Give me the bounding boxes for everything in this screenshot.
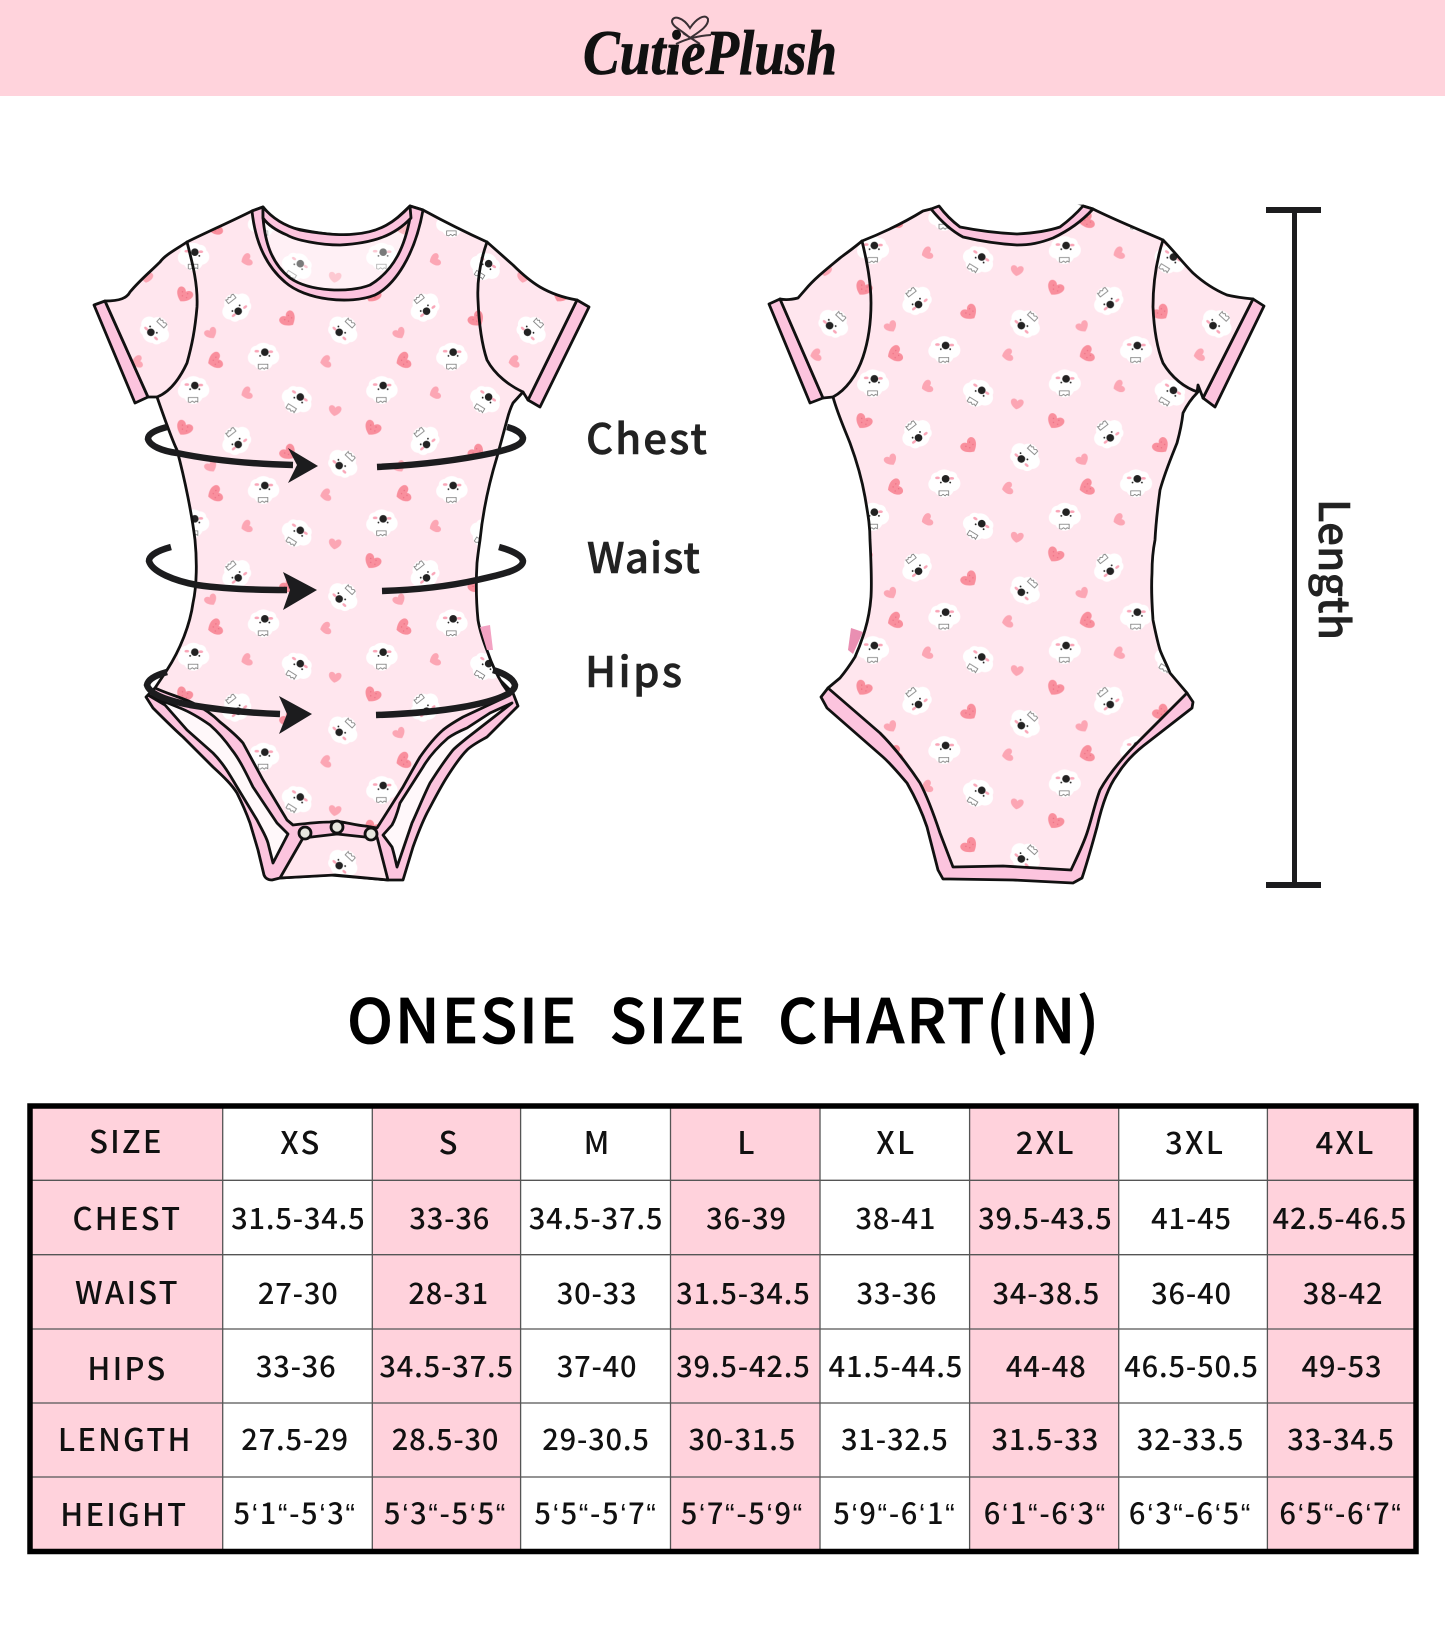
row: hips: HIPS — [87, 1344, 167, 1389]
right leg opening — [383, 703, 512, 867]
inside neck view — [263, 218, 410, 290]
back sleeve cuffs — [769, 299, 1264, 407]
row: height: 5‘3“-5‘5“ — [384, 1491, 507, 1533]
back hem band — [821, 688, 1193, 883]
row: height: 6‘5“-6‘7“ — [1279, 1491, 1403, 1533]
back neck band — [931, 206, 1093, 245]
row: height: 5‘7“-5‘9“ — [681, 1491, 804, 1533]
row: chest: 34.5-37.5 — [529, 1196, 663, 1238]
front leg bands and crotch — [146, 680, 518, 880]
row: hips: 46.5-50.5 — [1124, 1344, 1259, 1386]
measurement arrow: chest — [148, 427, 523, 483]
row: size — [89, 1117, 1376, 1163]
header band — [0, 0, 1445, 96]
row: hips: 49-53 — [1302, 1344, 1382, 1386]
row: chest: 36-39 — [706, 1196, 787, 1238]
size table — [30, 1106, 1416, 1552]
row: length — [58, 1415, 1395, 1460]
row: length: 28.5-30 — [392, 1417, 499, 1459]
back side tag — [848, 628, 863, 654]
row: length: 27.5-29 — [241, 1417, 349, 1459]
garment: front view — [94, 206, 589, 880]
row: chest: 42.5-46.5 — [1273, 1196, 1407, 1238]
logo: CutiePlush — [583, 17, 837, 88]
table backgrounds — [30, 1106, 1416, 1551]
row: waist: 27-30 — [258, 1271, 339, 1313]
row: length: 31.5-33 — [991, 1417, 1099, 1459]
row: length: 32-33.5 — [1137, 1417, 1244, 1459]
row: length: 33-34.5 — [1287, 1417, 1395, 1459]
back body fabric — [780, 206, 1253, 870]
label: Chest: Chest — [586, 406, 707, 467]
row: height — [60, 1490, 1403, 1535]
front side tag — [480, 625, 493, 650]
row: hips: 34.5-37.5 — [379, 1344, 514, 1386]
row: chest: 38-41 — [856, 1196, 936, 1238]
snaps — [299, 821, 377, 840]
row: size: S — [439, 1118, 460, 1163]
row: hips: 44-48 — [1006, 1344, 1087, 1386]
row: size: SIZE — [89, 1117, 164, 1162]
row: chest: 39.5-43.5 — [978, 1196, 1113, 1238]
row: length: 31-32.5 — [841, 1417, 949, 1459]
table outer border — [30, 1106, 1416, 1552]
row: size: 4XL — [1316, 1118, 1376, 1163]
row: waist: 30-33 — [557, 1271, 637, 1313]
crotch panel — [280, 834, 388, 880]
row: size: M — [584, 1118, 612, 1163]
row: chest: CHEST — [73, 1194, 182, 1239]
front neck band — [252, 206, 423, 300]
back neck band seen through opening — [263, 206, 411, 245]
row: waist — [75, 1268, 1383, 1313]
row: height: 6‘3“-6‘5“ — [1129, 1491, 1252, 1533]
front armhole seams — [157, 242, 523, 397]
row: length: LENGTH — [58, 1415, 193, 1460]
row: waist: 28-31 — [408, 1271, 489, 1313]
row: size: 2XL — [1016, 1118, 1076, 1163]
row: height: 5‘9“-6‘1“ — [833, 1491, 956, 1533]
table grid — [30, 1106, 1416, 1551]
row: height: 5‘5“-5‘7“ — [534, 1491, 658, 1533]
row: size: XS — [280, 1118, 322, 1163]
row: length: 29-30.5 — [542, 1417, 650, 1459]
row: waist: WAIST — [75, 1268, 180, 1313]
row: chest — [73, 1194, 1407, 1239]
measurement arrow: waist — [149, 547, 523, 610]
row: size: XL — [876, 1118, 916, 1163]
row: height: HEIGHT — [60, 1490, 188, 1535]
row: length: 30-31.5 — [688, 1417, 796, 1459]
front body fabric — [105, 206, 577, 828]
title: ONESIE SIZE CHART(IN) — [347, 972, 1099, 1061]
length measurement bar — [1266, 207, 1321, 888]
front sleeve cuffs — [94, 300, 589, 407]
row: chest: 41-45 — [1151, 1196, 1232, 1238]
white neckline cutout — [939, 200, 1083, 234]
row: waist: 34-38.5 — [992, 1271, 1100, 1313]
label: Hips: Hips — [585, 639, 682, 700]
label: Length: Length — [1306, 499, 1367, 640]
row: hips: 33-36 — [256, 1344, 337, 1386]
row: hips — [87, 1344, 1382, 1389]
row: waist: 31.5-34.5 — [676, 1271, 811, 1313]
garment: back view — [769, 200, 1264, 883]
icon: bow knot — [672, 17, 711, 44]
row: height: 5‘1“-5‘3“ — [234, 1491, 357, 1533]
row: waist: 33-36 — [857, 1271, 937, 1313]
row: chest: 33-36 — [409, 1196, 490, 1238]
row: hips: 37-40 — [557, 1344, 637, 1386]
back armhole seams — [833, 240, 1198, 397]
row: hips: 39.5-42.5 — [676, 1344, 811, 1386]
row: waist: 36-40 — [1151, 1271, 1232, 1313]
row: size: L — [737, 1118, 757, 1163]
row: height: 6‘1“-6‘3“ — [984, 1491, 1107, 1533]
measurement arrow: hips — [147, 670, 515, 734]
row: chest: 31.5-34.5 — [231, 1196, 366, 1238]
row: hips: 41.5-44.5 — [829, 1344, 963, 1386]
row: waist: 38-42 — [1303, 1271, 1383, 1313]
left leg opening — [148, 695, 288, 863]
label: Waist: Waist — [587, 525, 700, 586]
row: size: 3XL — [1165, 1118, 1225, 1163]
